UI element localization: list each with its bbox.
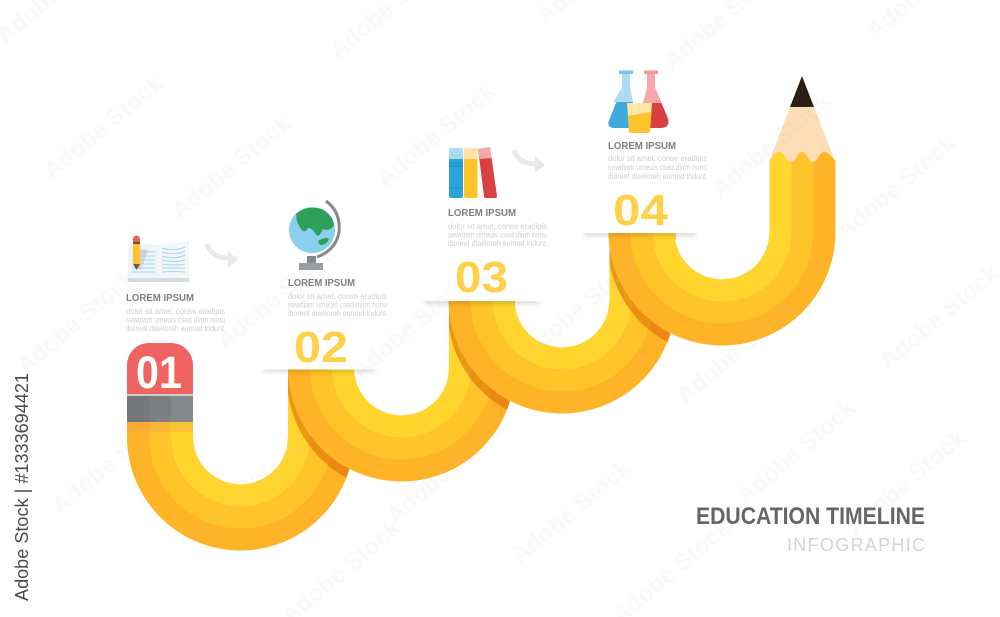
text block 3 [448, 207, 548, 248]
watermark pattern: Adobe Stock [47, 404, 177, 520]
text block 3: LOREM IPSUM [448, 207, 516, 219]
watermark pattern: Adobe Stock [842, 424, 972, 540]
text block 1: iboreet diaeloreh eumod tndunt. [126, 324, 226, 333]
text block 4: LOREM IPSUM [608, 140, 676, 152]
title: EDUCATION TIMELINE [696, 503, 925, 530]
icon: globe [289, 201, 339, 270]
stock side label: Adobe Stock | #1333694421 [12, 373, 32, 601]
text block 4 [608, 140, 708, 181]
stage 2 curve [262, 301, 515, 482]
number 04: 04 [613, 186, 669, 235]
watermark pattern: Adobe Stock [517, 249, 647, 365]
text block 2: sewdiam umeuis csed diam nonu [288, 300, 387, 310]
text block 1 [126, 292, 226, 333]
watermark pattern: Adobe Stock [382, 414, 512, 530]
text block 4: dolor sit amet, conse eradipis [608, 154, 707, 163]
watermark pattern: Adobe Stock [372, 77, 502, 193]
text block 3: sewdiam umeuis csed diam nonu [448, 230, 547, 240]
watermark pattern: Adobe Stock [212, 239, 342, 355]
text block 2: iboreet diaeloreh eumod tndunt. [288, 309, 388, 318]
stage 1 curve [127, 370, 350, 550]
text block 2: LOREM IPSUM [288, 277, 355, 289]
watermark pattern: Adobe Stock [167, 109, 297, 225]
title [696, 503, 925, 555]
pencil timeline path [127, 76, 836, 518]
stage 4 curve and pencil body [578, 160, 802, 312]
watermark pattern: Adobe Stock [12, 264, 142, 380]
icon: lab flasks and beaker [608, 70, 668, 133]
watermark pattern: Adobe Stock [39, 69, 169, 185]
watermark pattern: Adobe Stock [672, 294, 802, 410]
arrow 1 [207, 244, 238, 268]
text block 1: dolor sit amet, conse eradipis [126, 307, 225, 316]
arrow 2 [514, 150, 545, 173]
pencil tip [769, 76, 836, 162]
watermark pattern: Adobe Stock [732, 394, 862, 510]
watermark pattern: Adobe Stock [182, 434, 312, 550]
icon: row of books [449, 147, 497, 198]
watermark pattern: Adobe Stock [347, 269, 477, 385]
number 03: 03 [455, 253, 508, 302]
text block 4: iboreet diaeloreh eumod tndunt. [608, 172, 708, 181]
watermark pattern: Adobe Stock [507, 454, 637, 570]
text block 1: LOREM IPSUM [126, 292, 194, 304]
text block 2 [288, 277, 388, 318]
text block 3: iboreet diaeloreh eumod tndunt. [448, 239, 548, 248]
text block 3: dolor sit amet, conse eradipis [448, 222, 547, 231]
watermark pattern: Adobe Stock [707, 87, 837, 203]
title: INFOGRAPHIC [787, 535, 925, 555]
watermark pattern: Adobe Stock [832, 129, 962, 245]
stage 3 curve [424, 233, 676, 414]
eraser with number 01 [127, 343, 193, 432]
text block 1: sewdiam umeuis csed diam nonu [126, 316, 225, 324]
icon: open book with pencil [128, 236, 189, 282]
number 02: 02 [294, 323, 348, 372]
text block 2: dolor sit amet, conse eradipis [288, 292, 387, 301]
text block 4: sewdiam umeuis csed diam nonu [608, 163, 707, 172]
eraser with number 01: 01 [136, 347, 182, 398]
